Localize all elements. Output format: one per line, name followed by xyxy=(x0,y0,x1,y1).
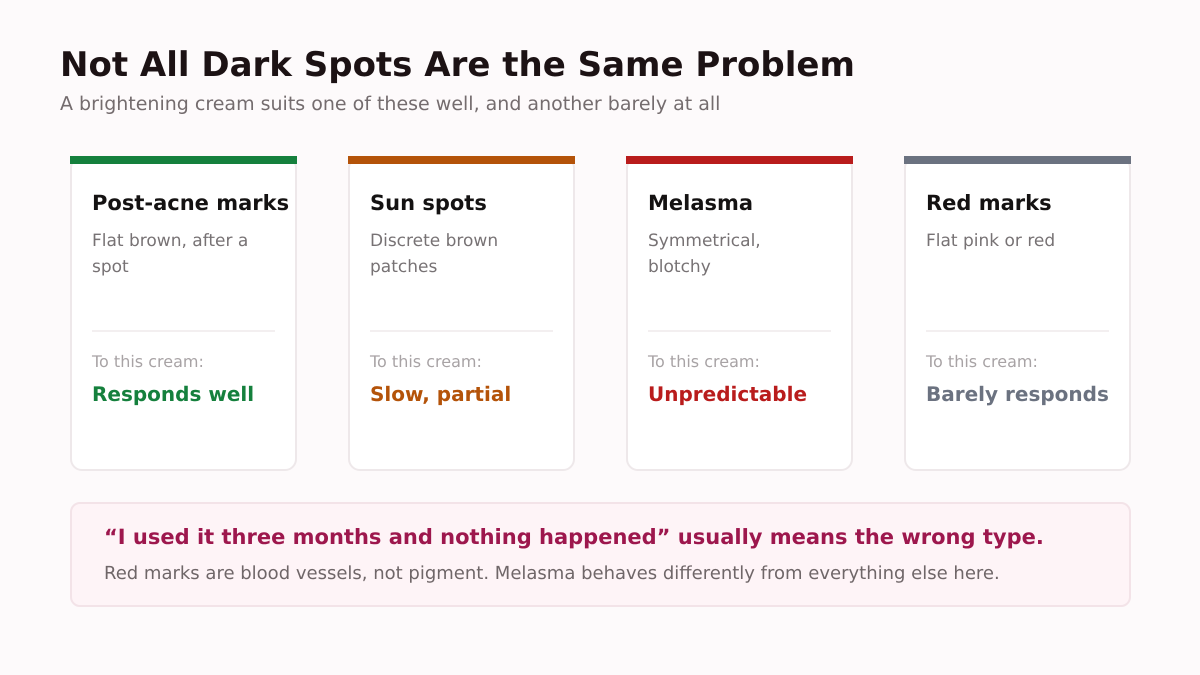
description: patches xyxy=(370,257,437,277)
description: Discrete brown xyxy=(370,231,498,251)
label: To this cream: xyxy=(370,352,482,371)
description xyxy=(92,231,248,277)
verdict: Barely responds xyxy=(926,382,1109,406)
accent bar: green xyxy=(70,156,297,164)
description xyxy=(648,231,761,277)
subtitle: A brightening cream suits one of these well, and another barely at all xyxy=(60,93,720,115)
label: To this cream: xyxy=(92,352,204,371)
callout body: Red marks are blood vessels, not pigment. Melasma behaves differently from everything else here. xyxy=(104,563,1000,584)
accent bar: grey xyxy=(904,156,1131,164)
description: blotchy xyxy=(648,257,711,277)
description: spot xyxy=(92,257,129,277)
callout xyxy=(70,502,1131,607)
description xyxy=(370,231,498,277)
panel: sun spots xyxy=(348,156,575,471)
label: To this cream: xyxy=(926,352,1038,371)
title: Not All Dark Spots Are the Same Problem xyxy=(60,45,855,85)
verdict: Responds well xyxy=(92,382,254,406)
card heading: Red marks xyxy=(926,191,1052,215)
panel: post-acne marks xyxy=(70,156,297,471)
description: Symmetrical, xyxy=(648,231,761,251)
panel: melasma xyxy=(626,156,853,471)
description: Flat pink or red xyxy=(926,231,1055,251)
verdict: Slow, partial xyxy=(370,382,511,406)
description: Flat brown, after a xyxy=(92,231,248,251)
callout heading: “I used it three months and nothing happened” usually means the wrong type. xyxy=(104,525,1044,549)
card heading: Sun spots xyxy=(370,191,487,215)
card heading: Melasma xyxy=(648,191,753,215)
card heading: Post-acne marks xyxy=(92,191,289,215)
accent bar: orange xyxy=(348,156,575,164)
panel: red marks xyxy=(904,156,1131,471)
verdict: Unpredictable xyxy=(648,382,807,406)
accent bar: red xyxy=(626,156,853,164)
label: To this cream: xyxy=(648,352,760,371)
